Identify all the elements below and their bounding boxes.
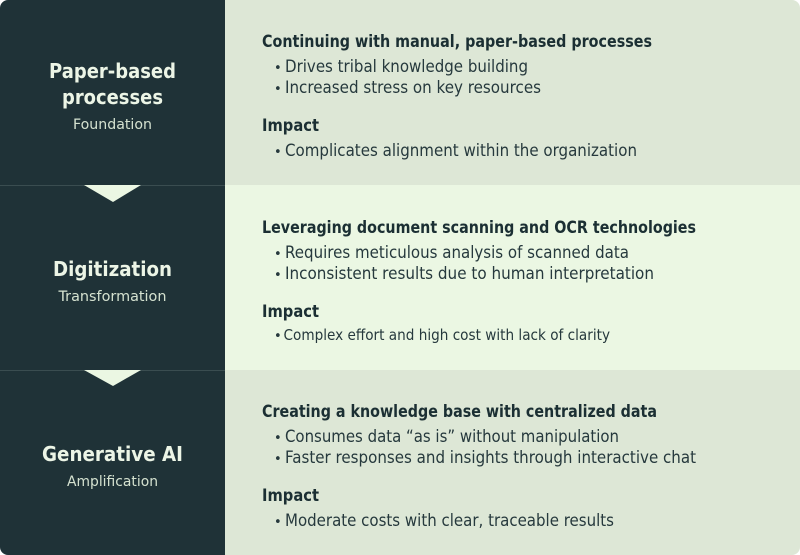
text block: row 1 content: • [274,61,282,76]
text block: row 3 content: • [274,515,282,530]
text block: row 3 content: Creating a knowledge base with centralized data [262,402,657,421]
text block: row 2 content: • [274,268,282,283]
panel: row 1 content background [225,0,800,185]
text block: row 3 content: • [274,431,282,446]
text block: row 3 content: Faster responses and insights through interactive chat [285,448,696,467]
text block: row 2 content: Impact [262,302,319,321]
text block: row 3 content [262,402,696,530]
arrow: row 2 to row 3 [0,370,225,386]
panel: left dark column [0,0,225,555]
label: paper-based processes [49,59,176,133]
label: generative AI [42,442,183,490]
label: generative AI: Amplification [67,474,158,490]
text block: row 2 content: Complex effort and high cost with lack of clarity [284,326,610,344]
text block: row 3 content: Impact [262,486,319,505]
arrow: row 1 to row 2 [0,185,225,202]
text block: row 2 content: • [274,247,282,262]
text block: row 1 content: Complicates alignment within the organization [285,141,637,160]
text block: row 1 content [262,32,652,160]
text block: row 2 content [262,218,696,344]
text block: row 3 content: Consumes data “as is” without manipulation [285,427,619,446]
text block: row 3 content: Moderate costs with clear, traceable results [285,511,614,530]
panel: row 2 content background [225,185,800,370]
text block: row 1 content: Drives tribal knowledge building [285,57,528,76]
label: digitization: Digitization [53,257,172,281]
label: generative AI: Generative AI [42,442,183,466]
text block: row 1 content: • [274,82,282,97]
text block: row 1 content: • [274,145,282,160]
label: digitization [53,257,172,305]
label: paper-based processes: Foundation [73,117,152,133]
text block: row 2 content: Inconsistent results due to human interpretation [285,264,654,283]
text block: row 1 content: Continuing with manual, paper-based processes [262,32,652,51]
label: paper-based processes: processes [62,85,163,109]
text block: row 3 content: • [274,452,282,467]
text block: row 2 content: • [274,329,282,344]
text block: row 2 content: Requires meticulous analysis of scanned data [285,243,629,262]
text block: row 1 content: Impact [262,116,319,135]
label: digitization: Transformation [58,289,166,305]
label: paper-based processes: Paper-based [49,59,176,83]
text block: row 1 content: Increased stress on key resources [285,78,541,97]
panel: row 3 content background [225,370,800,555]
text block: row 2 content: Leveraging document scanning and OCR technologies [262,218,696,237]
